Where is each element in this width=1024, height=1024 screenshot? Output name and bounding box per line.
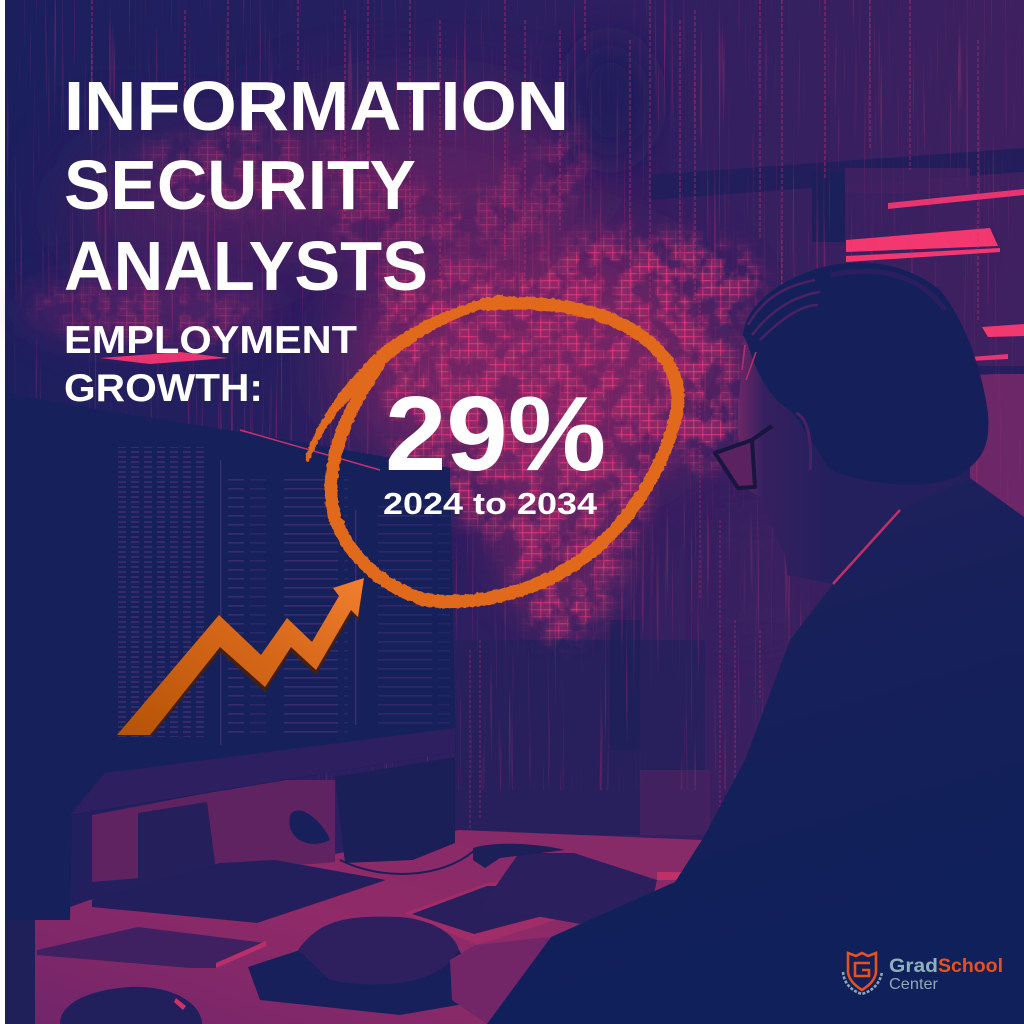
- title: ANALYSTS: [64, 227, 428, 305]
- logo: GradSchool Center: [843, 953, 1003, 994]
- ceiling lights: [100, 189, 1024, 364]
- statistic: 29%: 29%: [385, 375, 606, 493]
- far wall and ceiling structure: [455, 148, 1024, 835]
- background stand area: [92, 780, 335, 882]
- computer monitor: [5, 393, 475, 923]
- subtitle: employment growth: EMPLOYMENT: [64, 319, 357, 362]
- icon: glasses: [715, 426, 772, 488]
- title: SECURITY: [64, 146, 416, 224]
- rising orange arrow: [117, 578, 364, 736]
- logo: GradSchool Center: Grad: [889, 956, 938, 977]
- collar: [833, 510, 900, 584]
- statistic: 29%: 2024 to 2034: [383, 486, 598, 521]
- analyst silhouette: [487, 263, 1024, 1024]
- title: [64, 67, 569, 305]
- icon: shield: [843, 953, 882, 994]
- hand-drawn orange circle: [305, 294, 678, 602]
- hair: [743, 263, 988, 485]
- subtitle: employment growth: [64, 319, 357, 410]
- left pillar and mouse: [5, 920, 202, 1024]
- desk: [5, 830, 702, 1024]
- screen code text: [115, 447, 450, 745]
- world map data grid: [25, 120, 774, 654]
- logo: GradSchool Center: Center: [889, 976, 939, 993]
- keyboard and hands: [248, 844, 685, 1024]
- title: INFORMATION: [64, 67, 569, 145]
- ear: [796, 413, 810, 470]
- subtitle: employment growth: GROWTH:: [64, 367, 263, 410]
- logo: GradSchool Center: School: [938, 956, 1003, 977]
- torso: [487, 478, 1024, 1024]
- neck and face: [738, 330, 970, 584]
- laptop on desk: [37, 927, 266, 968]
